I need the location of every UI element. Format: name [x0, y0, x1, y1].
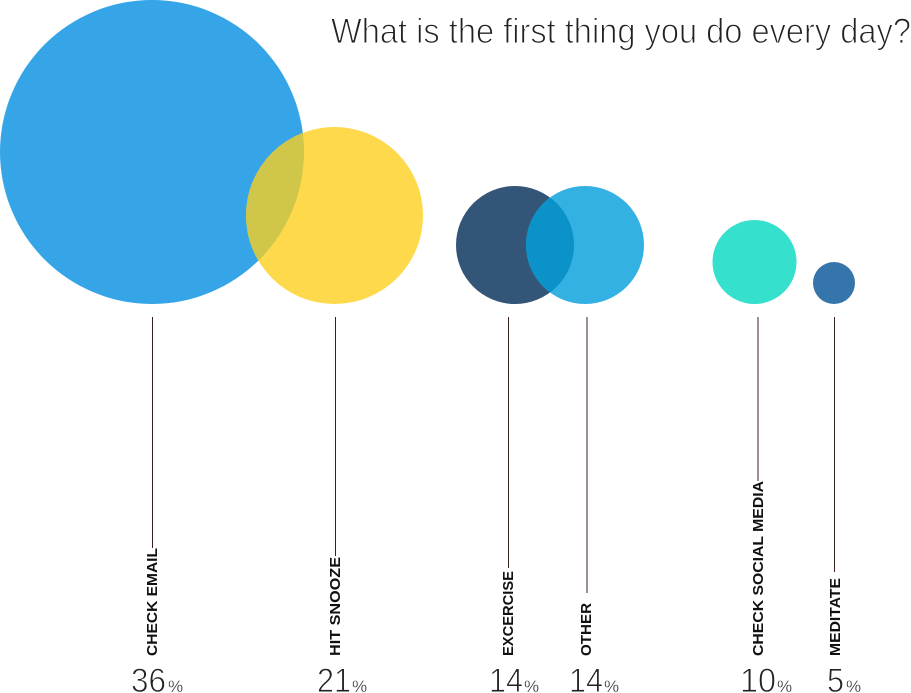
leader line: meditate [834, 317, 836, 572]
leader line: check social media [757, 317, 759, 481]
label: check social media: CHECK SOCIAL MEDIA [750, 481, 767, 656]
circle: check social media [712, 220, 796, 304]
circle: hit snooze [246, 127, 423, 304]
circle: meditate [813, 262, 855, 304]
label: check email: CHECK EMAIL [144, 548, 161, 656]
leader line: excercise [508, 317, 510, 568]
label: meditate: MEDITATE [827, 578, 844, 656]
label: hit snooze: HIT SNOOZE [327, 557, 344, 656]
label: excercise: EXCERCISE [500, 571, 517, 656]
leader line: hit snooze [334, 317, 336, 556]
circle: other [526, 186, 644, 304]
leader line: other [586, 317, 588, 593]
circle: check email [0, 0, 304, 304]
circle overlap: excercise and other [526, 198, 574, 292]
circle overlap: email and snooze [246, 132, 304, 260]
label: other: OTHER [578, 603, 595, 656]
circle: excercise [456, 186, 574, 304]
leader line: check email [152, 317, 154, 548]
value: 5% [827, 662, 861, 693]
